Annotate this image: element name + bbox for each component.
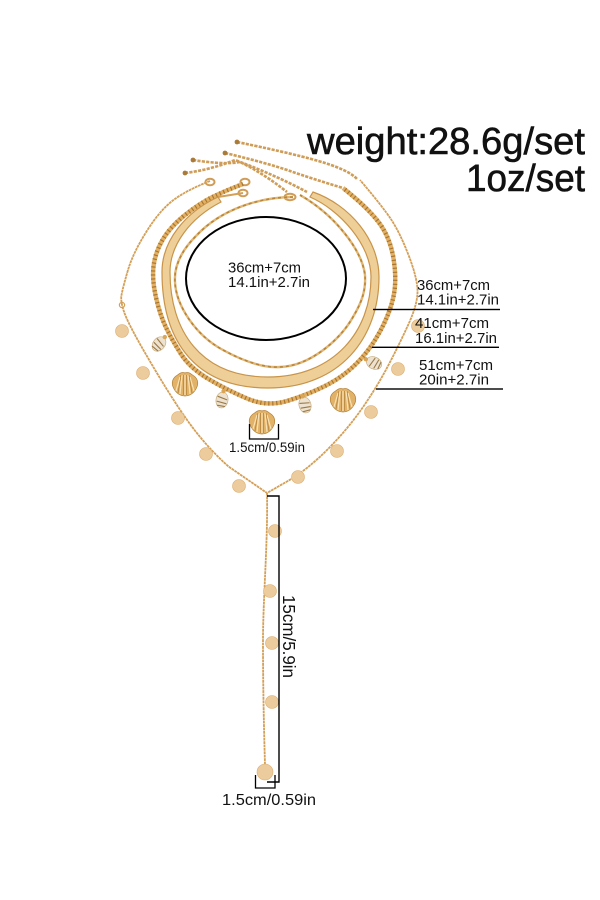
weight heading xyxy=(306,121,585,200)
weight heading: weight:28.6g/set xyxy=(306,121,585,163)
disc size bracket: 1.5cm/0.59in xyxy=(222,792,316,809)
long chain with lariat drop xyxy=(119,180,418,765)
callout: 36cm xyxy=(373,277,500,310)
callout: 41cm: 41cm+7cm xyxy=(415,315,489,332)
necklace set xyxy=(119,140,418,765)
callout: 51cm: 20in+2.7in xyxy=(419,372,489,388)
inner label: 36cm+7cm xyxy=(228,260,301,276)
lariat length bracket: 15cm/5.9in xyxy=(279,595,299,678)
curb chain xyxy=(153,184,395,403)
twisted thin chain xyxy=(175,195,365,367)
callout: 51cm: 51cm+7cm xyxy=(419,357,493,374)
shell size bracket xyxy=(229,424,305,455)
callout: 36cm: 14.1in+2.7in xyxy=(417,292,499,308)
lariat length bracket xyxy=(267,496,299,782)
shell size bracket: 1.5cm/0.59in xyxy=(229,439,305,455)
inner label xyxy=(228,260,310,291)
disc size bracket xyxy=(222,775,316,809)
sequin discs xyxy=(116,320,424,780)
callout: 41cm: 16.1in+2.7in xyxy=(415,330,497,347)
weight heading: 1oz/set xyxy=(466,158,585,200)
callout: 51cm xyxy=(376,357,503,390)
inner label: 14.1in+2.7in xyxy=(228,274,310,291)
callout: 41cm xyxy=(372,315,499,348)
extender chains xyxy=(183,140,357,192)
clasps xyxy=(206,179,296,200)
size oval xyxy=(186,217,346,340)
herringbone band xyxy=(162,192,379,388)
shell charms xyxy=(149,332,384,434)
callout: 36cm: 36cm+7cm xyxy=(417,277,490,294)
